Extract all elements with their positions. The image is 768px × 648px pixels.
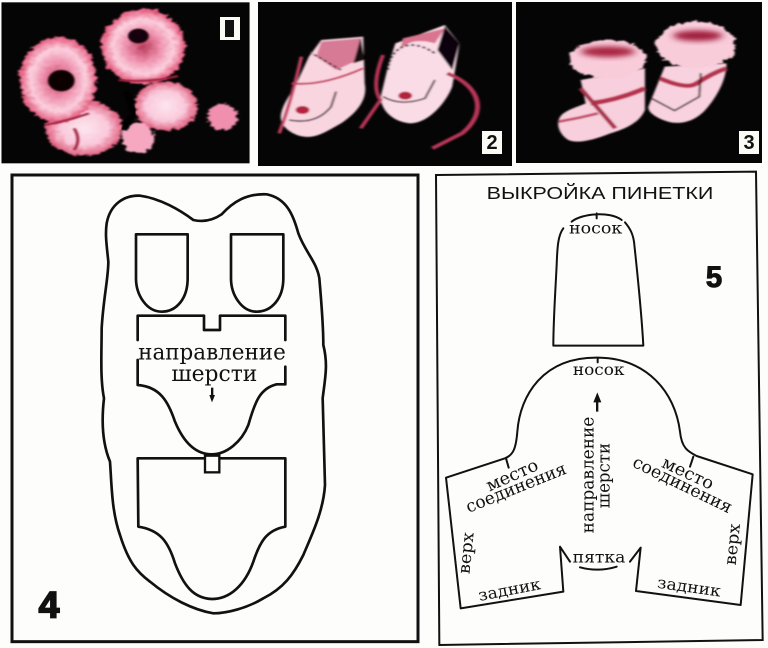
label: fur direction: шерсти bbox=[171, 361, 257, 387]
label: right back: задник bbox=[656, 573, 722, 601]
photo 1: background and fur pieces bbox=[1, 2, 250, 163]
label: left top edge: верх bbox=[454, 531, 478, 575]
label: right joint: место bbox=[659, 453, 717, 494]
number label 1 bbox=[220, 17, 240, 40]
left toe piece bbox=[136, 234, 188, 312]
upper toe pattern piece bbox=[553, 213, 643, 346]
arrow: fur direction down bbox=[209, 388, 215, 402]
label: fur direction: направление bbox=[138, 339, 286, 365]
label: heel: пятка bbox=[573, 547, 626, 566]
panel 4: layout of pattern pieces on fur bbox=[12, 175, 418, 642]
label: fur direction bbox=[138, 339, 286, 387]
label: fur direction vertical: шерсти bbox=[594, 443, 614, 508]
fur skin outline bbox=[101, 194, 326, 613]
number label 3: 3 bbox=[743, 132, 755, 154]
label: toe on upper piece: носок bbox=[569, 218, 622, 237]
title: ВЫКРОЙКА ПИНЕТКИ bbox=[487, 182, 713, 203]
label: fur direction vertical bbox=[578, 417, 614, 533]
panel: photo 1, pompom shapes bbox=[1, 2, 250, 163]
photo 2: left bootie bbox=[279, 37, 365, 137]
photo 2: background bbox=[258, 2, 512, 166]
number label 3 bbox=[739, 131, 759, 154]
photo 3: background bbox=[516, 2, 762, 163]
photo 3: right bootie bbox=[648, 63, 726, 123]
panel 5: bootie pattern bbox=[436, 172, 763, 645]
label: left joint: место bbox=[483, 456, 542, 496]
label: left joint: соединения bbox=[463, 459, 569, 518]
label: right top edge: верх bbox=[721, 522, 744, 566]
label: right joint: соединения bbox=[629, 453, 735, 518]
right toe piece bbox=[231, 234, 283, 312]
panel 5 frame bbox=[436, 172, 763, 645]
joint notch bbox=[205, 456, 219, 472]
arrow: fur direction up bbox=[593, 392, 601, 412]
number 5: 5 bbox=[706, 261, 722, 294]
number label 2 bbox=[482, 131, 502, 154]
upper sole piece bbox=[138, 316, 285, 454]
label: toe on sole piece: носок bbox=[573, 360, 625, 379]
sole pattern piece bbox=[446, 358, 753, 608]
number label 2: 2 bbox=[486, 132, 498, 154]
panel 4 frame bbox=[12, 175, 418, 642]
panel: photo 3, finished booties with fur cuffs bbox=[516, 2, 762, 163]
photo 2: right bootie bbox=[361, 25, 478, 148]
panel: photo 2, sewn booties with ties bbox=[258, 2, 512, 166]
photo 3: left bootie bbox=[558, 68, 645, 142]
number 4: 4 bbox=[39, 584, 60, 626]
label: fur direction vertical: направление bbox=[578, 417, 598, 533]
photo 3: fur cuffs bbox=[569, 22, 735, 79]
lower sole piece bbox=[138, 458, 285, 599]
label: left back: задник bbox=[476, 574, 542, 605]
